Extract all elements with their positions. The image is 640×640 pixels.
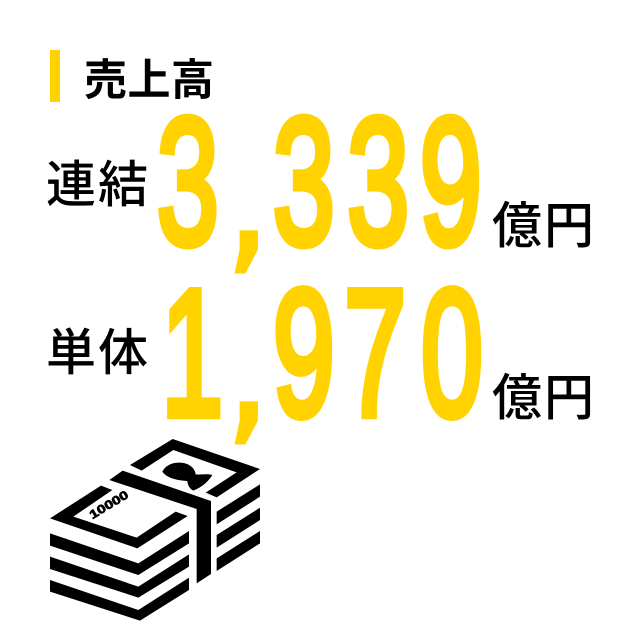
note denomination: 10000 xyxy=(87,487,131,522)
value: 1,970 xyxy=(161,252,483,457)
portrait on note xyxy=(162,463,212,491)
value: 3,339: , xyxy=(229,135,269,286)
unit: 億円 (consolidated): 億円 xyxy=(492,198,594,254)
value: 1,970: , xyxy=(229,306,269,457)
label: 単体: 単体 xyxy=(46,325,148,381)
paper band xyxy=(109,471,211,583)
value: 3,339 xyxy=(157,80,482,286)
unit: 億円 (standalone): 億円 xyxy=(492,370,594,426)
icon: stack of banknotes xyxy=(50,439,260,621)
front page edges xyxy=(50,531,189,621)
right side page edges xyxy=(217,484,260,571)
heading accent bar xyxy=(50,50,60,102)
top note frame xyxy=(130,439,260,497)
front note frame xyxy=(50,486,188,548)
value: 1,970: 1 xyxy=(161,252,223,453)
value: 3,339: 3 xyxy=(157,80,219,282)
value: 1,970: 970 xyxy=(273,252,483,453)
heading: 売上高: 売上高 xyxy=(84,57,214,105)
value: 3,339: 339 xyxy=(273,80,482,282)
label: 連結: 連結 xyxy=(46,157,148,213)
